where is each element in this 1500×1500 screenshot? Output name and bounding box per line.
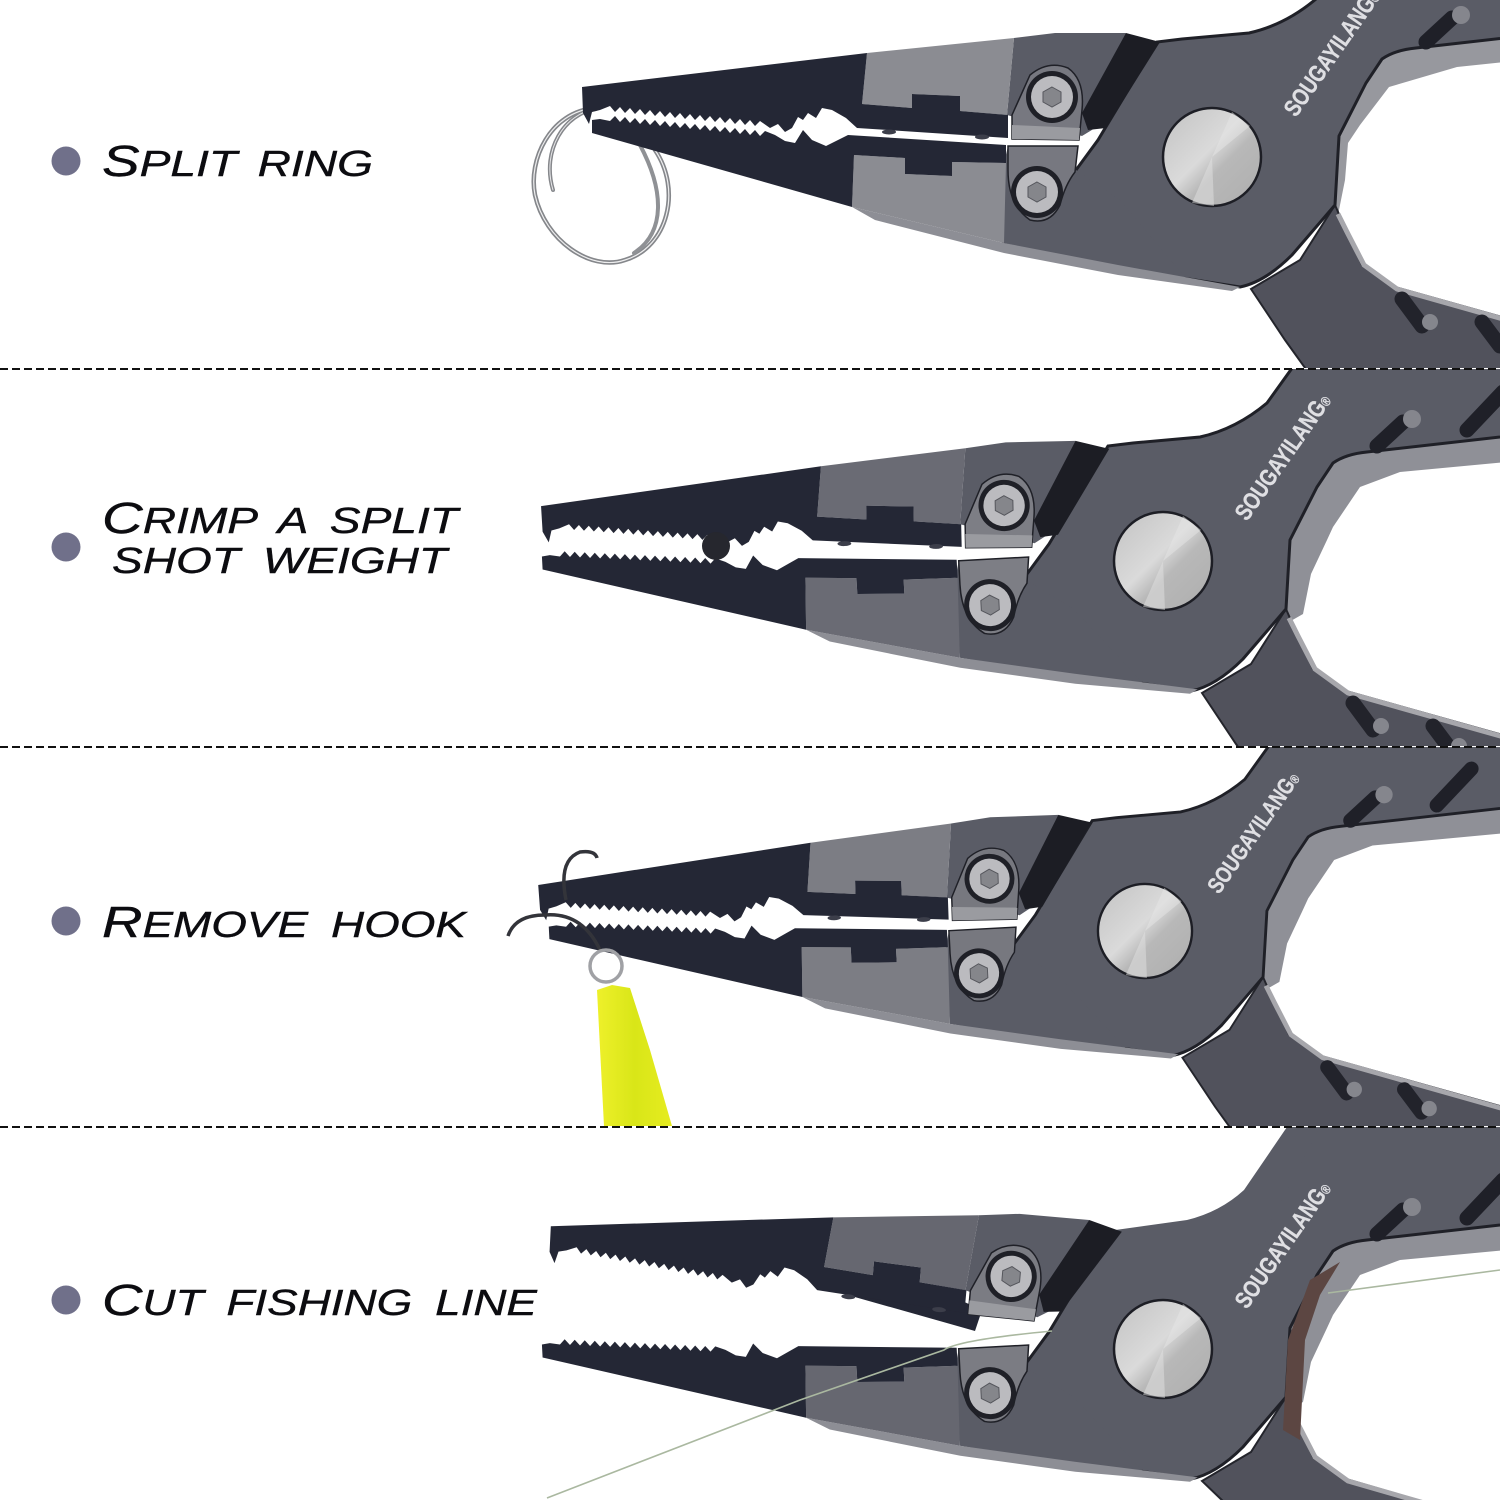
lower jaw xyxy=(542,1307,1198,1500)
upper jaw xyxy=(546,1173,1123,1328)
brand logo: SOUGAYILANG® xyxy=(1230,1176,1337,1313)
label: split ring: SPLIT RING xyxy=(102,137,373,186)
handle bevel xyxy=(1264,810,1500,988)
hole reflection xyxy=(1283,1262,1340,1440)
plier body and hub xyxy=(1004,0,1500,287)
lower jaw xyxy=(592,116,1240,291)
label: crimp a split shot weight: CRIMP A SPLIT xyxy=(102,494,462,543)
upper jaw xyxy=(540,440,1111,558)
upper jaw xyxy=(538,814,1090,922)
panel: crimp a split shot weight xyxy=(52,369,1500,746)
upper jaw xyxy=(582,33,1160,140)
label: cut fishing line: CUT FISHING LINE xyxy=(102,1276,538,1325)
split shot weight xyxy=(702,535,730,560)
plier body and hub xyxy=(1028,369,1500,692)
fishing line xyxy=(547,1270,1500,1498)
brand logo: SOUGAYILANG® xyxy=(1230,388,1337,525)
split ring metal loop xyxy=(534,108,669,263)
handle bevel xyxy=(1336,40,1500,212)
bullet: cut fishing line xyxy=(52,1286,80,1314)
panel: remove hook xyxy=(52,747,1500,1126)
lower jaw xyxy=(542,551,1198,694)
plier handle xyxy=(1202,1397,1431,1500)
plier handle xyxy=(1200,610,1500,746)
upper body shoulder xyxy=(1116,1127,1314,1234)
fishing hook and ring xyxy=(508,852,622,982)
bullet: split ring xyxy=(52,146,80,176)
label: remove hook: REMOVE HOOK xyxy=(102,898,469,947)
panel: cut fishing line xyxy=(52,1120,1500,1500)
plier body and hub xyxy=(1028,1127,1500,1480)
label: crimp a split shot weight xyxy=(104,502,462,574)
plier handle xyxy=(1182,977,1500,1137)
plier handle xyxy=(1251,205,1500,372)
label: crimp a split shot weight: SHOT WEIGHT xyxy=(112,540,451,581)
handle bevel xyxy=(1288,438,1500,620)
upper jaw flange xyxy=(844,1294,980,1331)
bullet: crimp xyxy=(52,532,80,562)
plier body and hub xyxy=(1015,747,1500,1057)
yellow lure xyxy=(597,985,672,1126)
lower jaw xyxy=(548,922,1178,1058)
handle bevel xyxy=(1291,1226,1500,1403)
brand logo: SOUGAYILANG® xyxy=(1202,766,1305,898)
panel: split ring xyxy=(52,0,1500,372)
bullet: remove hook xyxy=(52,906,80,936)
